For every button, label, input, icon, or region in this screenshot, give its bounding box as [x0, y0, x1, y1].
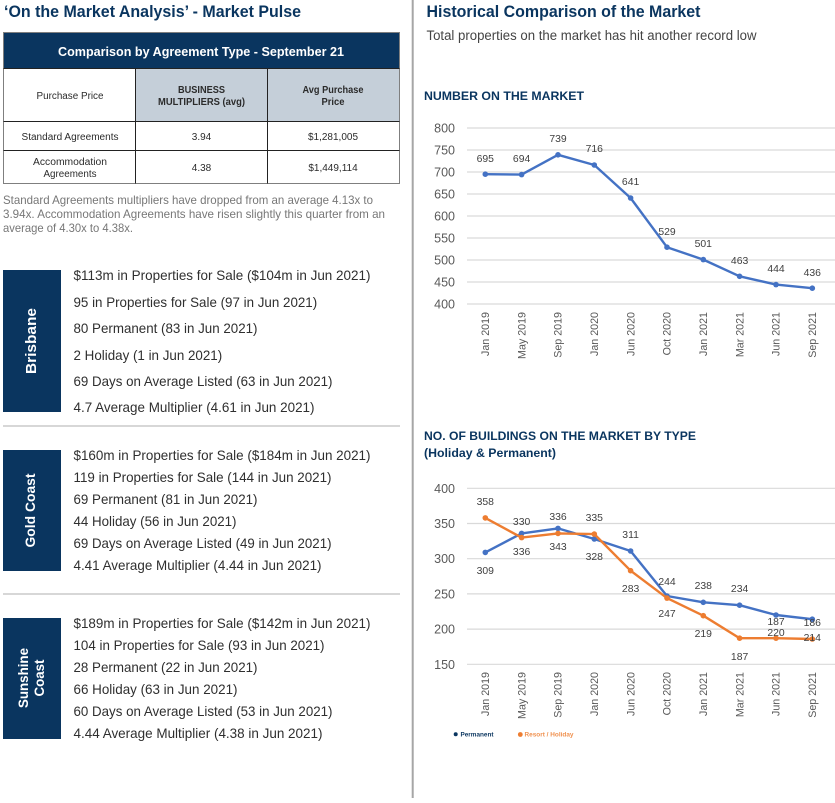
data labels: 330	[513, 517, 530, 528]
x axis labels: Oct 2020	[662, 672, 674, 715]
line chart: number on the market	[434, 122, 835, 359]
Sunshine Coast statistics: 28 Permanent (22 in Jun 2021)	[74, 659, 258, 675]
Brisbane statistics: 80 Permanent (83 in Jun 2021)	[74, 320, 258, 336]
x axis labels: Sep 2019	[553, 312, 565, 358]
data labels: 335	[586, 513, 603, 524]
Gold Coast statistics: $160m in Properties for Sale ($184m in Jun 2021)	[74, 447, 370, 463]
data labels: 219	[695, 629, 712, 640]
data labels: 244	[658, 577, 676, 588]
column headings: Avg Purchase	[302, 85, 364, 96]
x axis labels: Sep 2019	[553, 672, 565, 718]
comparison table	[3, 32, 400, 184]
line chart: buildings by type	[434, 482, 835, 719]
Sunshine Coast statistics: 60 Days on Average Listed (53 in Jun 2021)	[74, 703, 332, 719]
data labels: 641	[622, 177, 639, 188]
region label: Gold Coast: Gold Coast	[22, 473, 38, 548]
chart legend: Permanent	[460, 732, 494, 738]
column headings	[36, 85, 364, 108]
panel: Gold Coast	[3, 447, 370, 573]
data labels: 238	[695, 581, 712, 592]
data labels: 739	[549, 134, 567, 145]
data labels: 436	[804, 268, 821, 279]
y axis labels: 450	[434, 276, 455, 290]
y axis labels	[434, 482, 455, 672]
column headings: Purchase Price	[36, 91, 104, 102]
x axis labels: Jun 2020	[625, 312, 637, 356]
x axis labels: Jan 2021	[698, 672, 710, 716]
x axis labels: Jan 2020	[589, 672, 601, 716]
x axis labels: Jun 2020	[625, 672, 637, 716]
Gold Coast statistics: 119 in Properties for Sale (144 in Jun 2021)	[74, 469, 332, 485]
x axis labels: Jun 2021	[771, 672, 783, 716]
data labels: 501	[695, 239, 712, 250]
x axis labels: Jan 2019	[480, 672, 492, 716]
Brisbane statistics: 4.7 Average Multiplier (4.61 in Jun 2021)	[74, 399, 314, 415]
data labels	[477, 497, 821, 663]
Brisbane statistics: 69 Days on Average Listed (63 in Jun 2021)	[74, 373, 332, 389]
x axis labels	[480, 312, 819, 359]
data labels: 336	[513, 547, 530, 558]
series: resort / holiday	[482, 515, 815, 642]
Gold Coast statistics	[74, 447, 370, 573]
Gold Coast statistics: 69 Permanent (81 in Jun 2021)	[74, 491, 258, 507]
data labels: 220	[767, 628, 785, 639]
data labels	[477, 134, 821, 279]
right subheading: Total properties on the market has hit another record low	[426, 28, 757, 43]
series: permanent	[482, 526, 815, 622]
x axis labels: Jan 2020	[589, 312, 601, 356]
data labels: 187	[731, 652, 748, 663]
Brisbane statistics: 95 in Properties for Sale (97 in Jun 2021)	[74, 294, 317, 310]
data labels: 311	[622, 530, 639, 541]
row: accommodation agreements: $1,449,114	[308, 163, 358, 174]
y axis labels: 400	[434, 298, 455, 312]
data labels: 694	[513, 154, 530, 165]
row: standard agreements: Standard Agreements	[22, 132, 118, 143]
data labels: 444	[767, 264, 785, 275]
region label: Gold Coast	[3, 450, 61, 571]
data labels: 187	[767, 617, 785, 628]
column headings: MULTIPLIERS (avg)	[158, 97, 245, 108]
row: accommodation agreements: Accommodation	[33, 157, 107, 168]
Brisbane statistics: $113m in Properties for Sale ($104m in Jun 2021)	[74, 267, 370, 283]
x axis labels: Mar 2021	[734, 312, 746, 357]
chart title: number on the market: NUMBER ON THE MARKET	[424, 89, 585, 103]
summary paragraph: average of 4.30x to 4.38x.	[3, 221, 133, 235]
data labels: 336	[549, 512, 567, 523]
y axis labels: 350	[434, 517, 455, 531]
chart title: buildings by type	[424, 429, 696, 460]
y axis labels: 650	[434, 188, 455, 202]
Brisbane statistics: 2 Holiday (1 in Jun 2021)	[74, 347, 222, 363]
right heading: Historical Comparison of the Market	[426, 3, 701, 21]
Sunshine Coast statistics	[74, 615, 370, 741]
y axis labels: 600	[434, 210, 455, 224]
row: standard agreements: 3.94	[192, 132, 212, 143]
data labels: 695	[477, 154, 494, 165]
y axis labels: 500	[434, 254, 455, 268]
x axis labels: Jan 2021	[698, 312, 710, 356]
x axis labels	[480, 672, 819, 719]
data labels: 463	[731, 256, 748, 267]
row: accommodation agreements: 4.38	[192, 163, 212, 174]
row: standard agreements	[22, 132, 358, 143]
data labels: 283	[622, 584, 639, 595]
x axis labels: May 2019	[516, 312, 528, 359]
y axis labels: 400	[434, 482, 455, 496]
data labels: 234	[731, 584, 748, 595]
data series	[482, 152, 815, 291]
left heading: ‘On the Market Analysis’ - Market Pulse	[4, 3, 301, 21]
Sunshine Coast statistics: 4.44 Average Multiplier (4.38 in Jun 2021)	[74, 725, 322, 741]
column headings: BUSINESS	[178, 85, 225, 96]
region label: Sunshine Coast	[3, 618, 61, 739]
data labels: 358	[477, 497, 494, 508]
column headings: Price	[322, 97, 345, 108]
data labels: 716	[586, 144, 603, 155]
y axis labels: 200	[434, 623, 455, 637]
y axis labels: 700	[434, 166, 455, 180]
row: accommodation agreements	[33, 157, 358, 180]
y axis labels: 150	[434, 658, 455, 672]
chart title: buildings by type: NO. OF BUILDINGS ON THE MARKET BY TYPE	[424, 429, 696, 443]
Sunshine Coast statistics: 66 Holiday (63 in Jun 2021)	[74, 681, 238, 697]
chart legend	[454, 732, 574, 738]
data labels: 529	[658, 227, 676, 238]
panel: Sunshine Coast	[3, 615, 370, 741]
chart legend: Resort / Holiday	[524, 732, 574, 738]
region label: Sunshine Coast: Coast	[31, 659, 47, 696]
row: standard agreements: $1,281,005	[308, 132, 358, 143]
summary paragraph	[3, 193, 385, 235]
data labels: 343	[549, 542, 567, 553]
y axis labels: 550	[434, 232, 455, 246]
x axis labels: Sep 2021	[807, 672, 819, 718]
y axis labels: 300	[434, 552, 455, 566]
x axis labels: Sep 2021	[807, 312, 819, 358]
x axis labels: Jan 2019	[480, 312, 492, 356]
y axis labels: 250	[434, 587, 455, 601]
data labels: 247	[658, 609, 676, 620]
y axis labels	[434, 122, 455, 312]
Brisbane statistics	[74, 267, 370, 415]
Gold Coast statistics: 69 Days on Average Listed (49 in Jun 2021)	[74, 535, 332, 551]
chart title: buildings by type: (Holiday & Permanent)	[424, 446, 556, 460]
region label: Sunshine Coast: Sunshine	[15, 648, 31, 708]
y axis labels: 750	[434, 144, 455, 158]
x axis labels: May 2019	[516, 672, 528, 719]
x axis labels: Mar 2021	[734, 672, 746, 717]
Sunshine Coast statistics: 104 in Properties for Sale (93 in Jun 2021)	[74, 637, 324, 653]
summary paragraph: 3.94x. Accommodation Agreements have risen slightly this quarter from an	[3, 207, 385, 221]
summary paragraph: Standard Agreements multipliers have dropped from an average 4.13x to	[3, 193, 373, 207]
panel: Brisbane	[3, 267, 370, 415]
data labels: 328	[586, 552, 603, 563]
table header	[3, 32, 400, 69]
data labels: 186	[804, 618, 821, 629]
region label: Brisbane	[3, 270, 61, 412]
data labels: 309	[477, 566, 494, 577]
Gold Coast statistics: 4.41 Average Multiplier (4.44 in Jun 2021)	[74, 557, 322, 573]
x axis labels: Jun 2021	[771, 312, 783, 356]
data labels: 214	[804, 633, 821, 644]
Sunshine Coast statistics: $189m in Properties for Sale ($142m in Jun 2021)	[74, 615, 370, 631]
Gold Coast statistics: 44 Holiday (56 in Jun 2021)	[74, 513, 236, 529]
y axis labels: 800	[434, 122, 455, 136]
table header: Comparison by Agreement Type - September 21	[58, 44, 344, 59]
region label: Brisbane: Brisbane	[23, 308, 40, 374]
x axis labels: Oct 2020	[662, 312, 674, 355]
row: accommodation agreements: Agreements	[44, 169, 96, 180]
